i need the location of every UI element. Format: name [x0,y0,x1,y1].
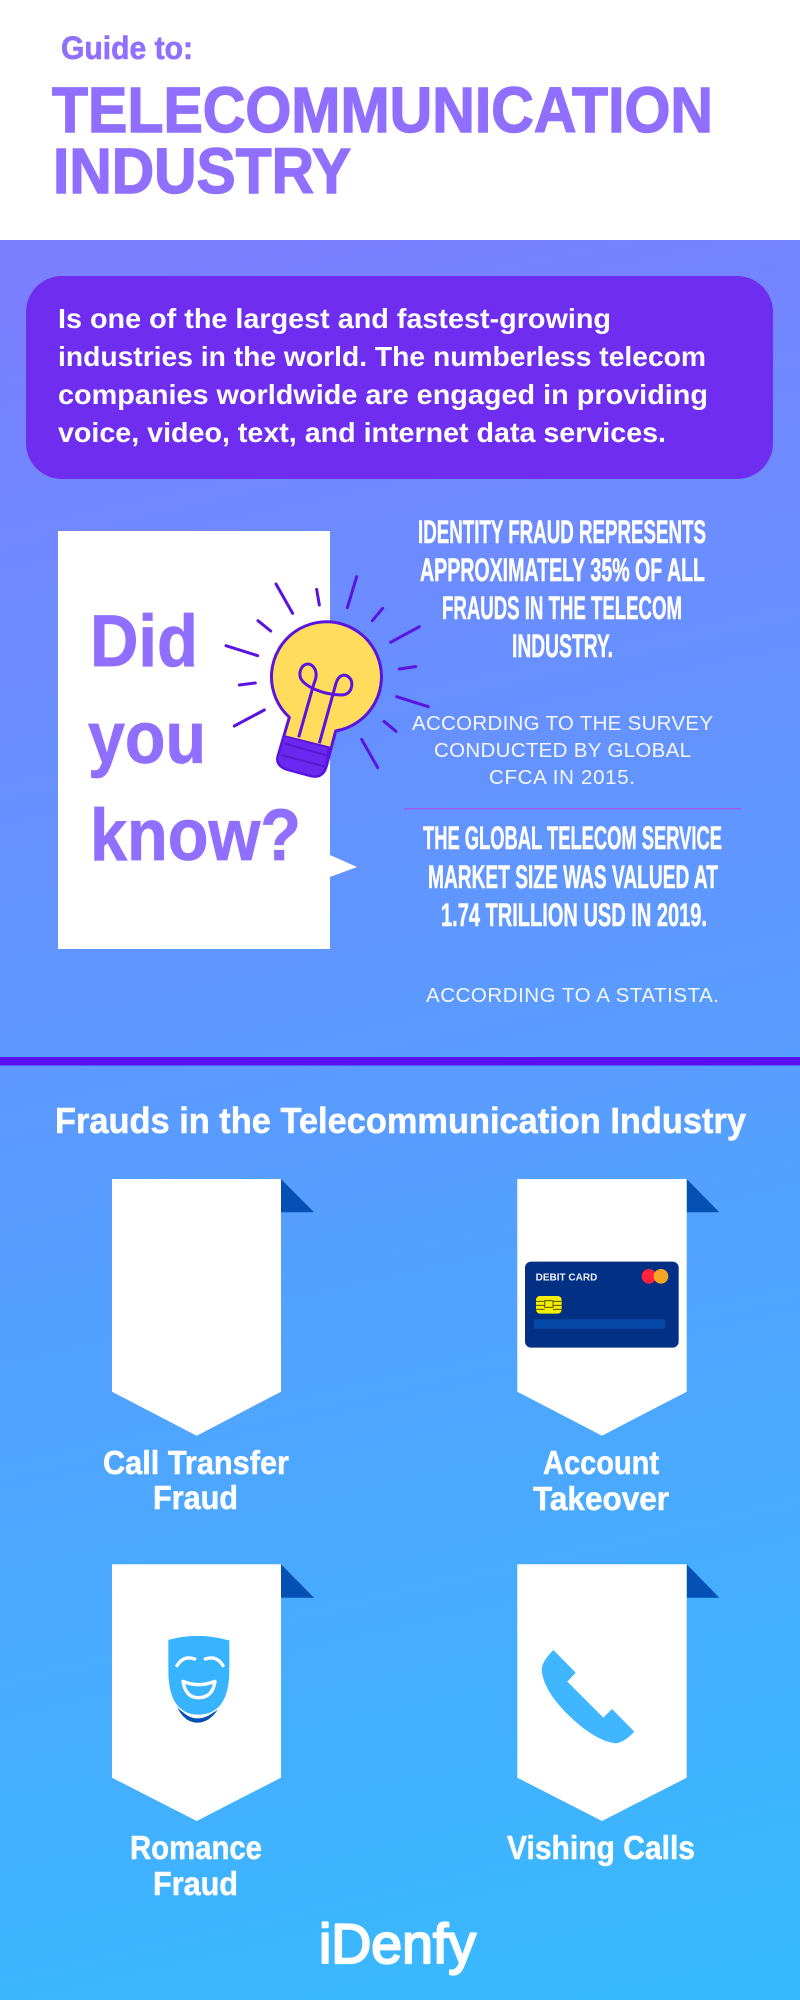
label [533,1444,669,1517]
label: Romance [130,1829,262,1866]
source note 1 [412,712,713,789]
fact 1: identity fraud [418,514,706,664]
label: Fraud [153,1865,238,1902]
label: Fraud [153,1479,238,1516]
header title block [52,30,713,207]
did you know heading: you [88,698,206,779]
label [130,1829,262,1902]
card: call transfer fraud [103,1179,314,1516]
logo: iDenfy: iDenfy [319,1912,476,1975]
icon: debit card [525,1262,679,1348]
intro text: industries in the world. The numberless telecom [58,341,706,372]
intro text: Is one of the largest and fastest-growing [58,303,611,334]
title [52,74,713,207]
label: Account [543,1444,659,1481]
icon: smiling mask [168,1635,230,1723]
source note 1: ACCORDING TO THE SURVEY [412,712,713,735]
intro text [58,303,708,448]
intro text: companies worldwide are engaged in providing [58,379,708,410]
card: romance fraud [112,1564,314,1902]
label: Takeover [533,1480,669,1517]
did you know heading [88,601,301,876]
label: Vishing Calls [507,1829,695,1866]
title: INDUSTRY [53,135,351,207]
source note 1: CFCA IN 2015. [489,766,635,789]
label: Call Transfer [103,1444,289,1481]
card: vishing calls [507,1564,719,1866]
panel: intro [26,276,773,479]
title: TELECOMMUNICATION [52,74,713,146]
label [103,1444,289,1516]
intro text: voice, video, text, and internet data services. [58,417,666,448]
source note 2: ACCORDING TO A STATISTA. [426,984,719,1007]
did you know heading: know? [90,795,301,876]
source note 1: CONDUCTED BY GLOBAL [434,739,691,762]
kicker: guide to: Guide to: [61,30,193,66]
fact 2: market size [423,820,722,933]
icon: telephone handset [542,1650,634,1743]
card: account takeover [517,1179,719,1517]
section heading: Frauds in the Telecommunication Industry [55,1100,746,1141]
panel: did you know speech bubble [58,531,357,949]
icon: debit card: DEBIT CARD [536,1272,597,1283]
did you know heading: Did [90,601,198,682]
fact 1: identity fraud: INDUSTRY. [512,628,613,664]
icon: light bulb [226,577,428,776]
